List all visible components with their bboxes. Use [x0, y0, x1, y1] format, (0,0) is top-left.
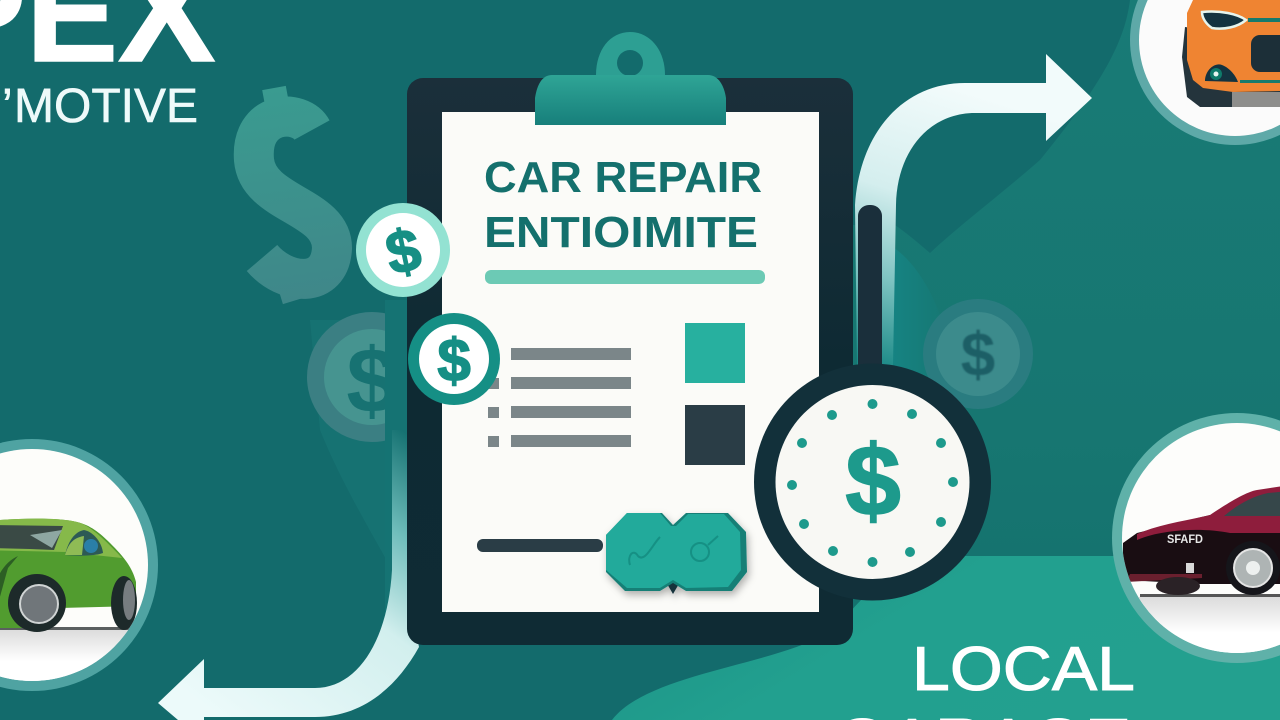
logo text: Apex Automotive: ’MOTIVE	[2, 80, 198, 133]
logo text: Apex Automotive	[0, 0, 215, 133]
paper sheet	[442, 112, 819, 612]
title underline	[485, 270, 765, 284]
document title: CAR REPAIR	[484, 153, 762, 202]
arrow: up to the top-right car	[855, 54, 1092, 365]
clipboard clip	[535, 32, 726, 125]
document title	[484, 153, 762, 257]
car badge: right maroon car	[1110, 413, 1280, 663]
icon: ghost coin left: $	[346, 330, 398, 432]
icon: ghost coin left	[307, 300, 437, 650]
clipboard board	[407, 78, 853, 645]
document title: ENTIOIMITE	[484, 208, 758, 257]
label: local garage	[850, 646, 1134, 720]
icon: coin two	[408, 313, 500, 405]
stamp badge	[606, 513, 747, 594]
icon: large ghost dollar sign	[254, 88, 332, 298]
icon: coin one: $	[380, 215, 427, 288]
lens dots	[787, 399, 958, 567]
lens dollar sign: $	[845, 425, 901, 537]
car badge: top right orange car	[1130, 0, 1280, 145]
panel: local garage backdrop	[612, 556, 1280, 720]
icon: ghost coin right: $	[961, 321, 995, 390]
teal swatch	[685, 323, 745, 383]
car badge: left green car	[0, 439, 158, 691]
car badge: right maroon car: SFAFD	[1167, 532, 1203, 546]
magnifier lens	[754, 364, 991, 600]
icon: ghost coin right	[923, 299, 1033, 409]
magnifier handle	[858, 205, 882, 375]
magnifying glass	[754, 205, 991, 600]
label: local garage: LOCAL	[912, 635, 1135, 704]
clipboard	[407, 32, 853, 645]
line items list	[488, 348, 631, 447]
arrow: down to the left car	[158, 430, 419, 720]
icon: coin two: $	[437, 327, 471, 394]
signature line	[477, 539, 603, 552]
icon: coin one	[356, 203, 450, 297]
dark swatch	[685, 405, 745, 465]
